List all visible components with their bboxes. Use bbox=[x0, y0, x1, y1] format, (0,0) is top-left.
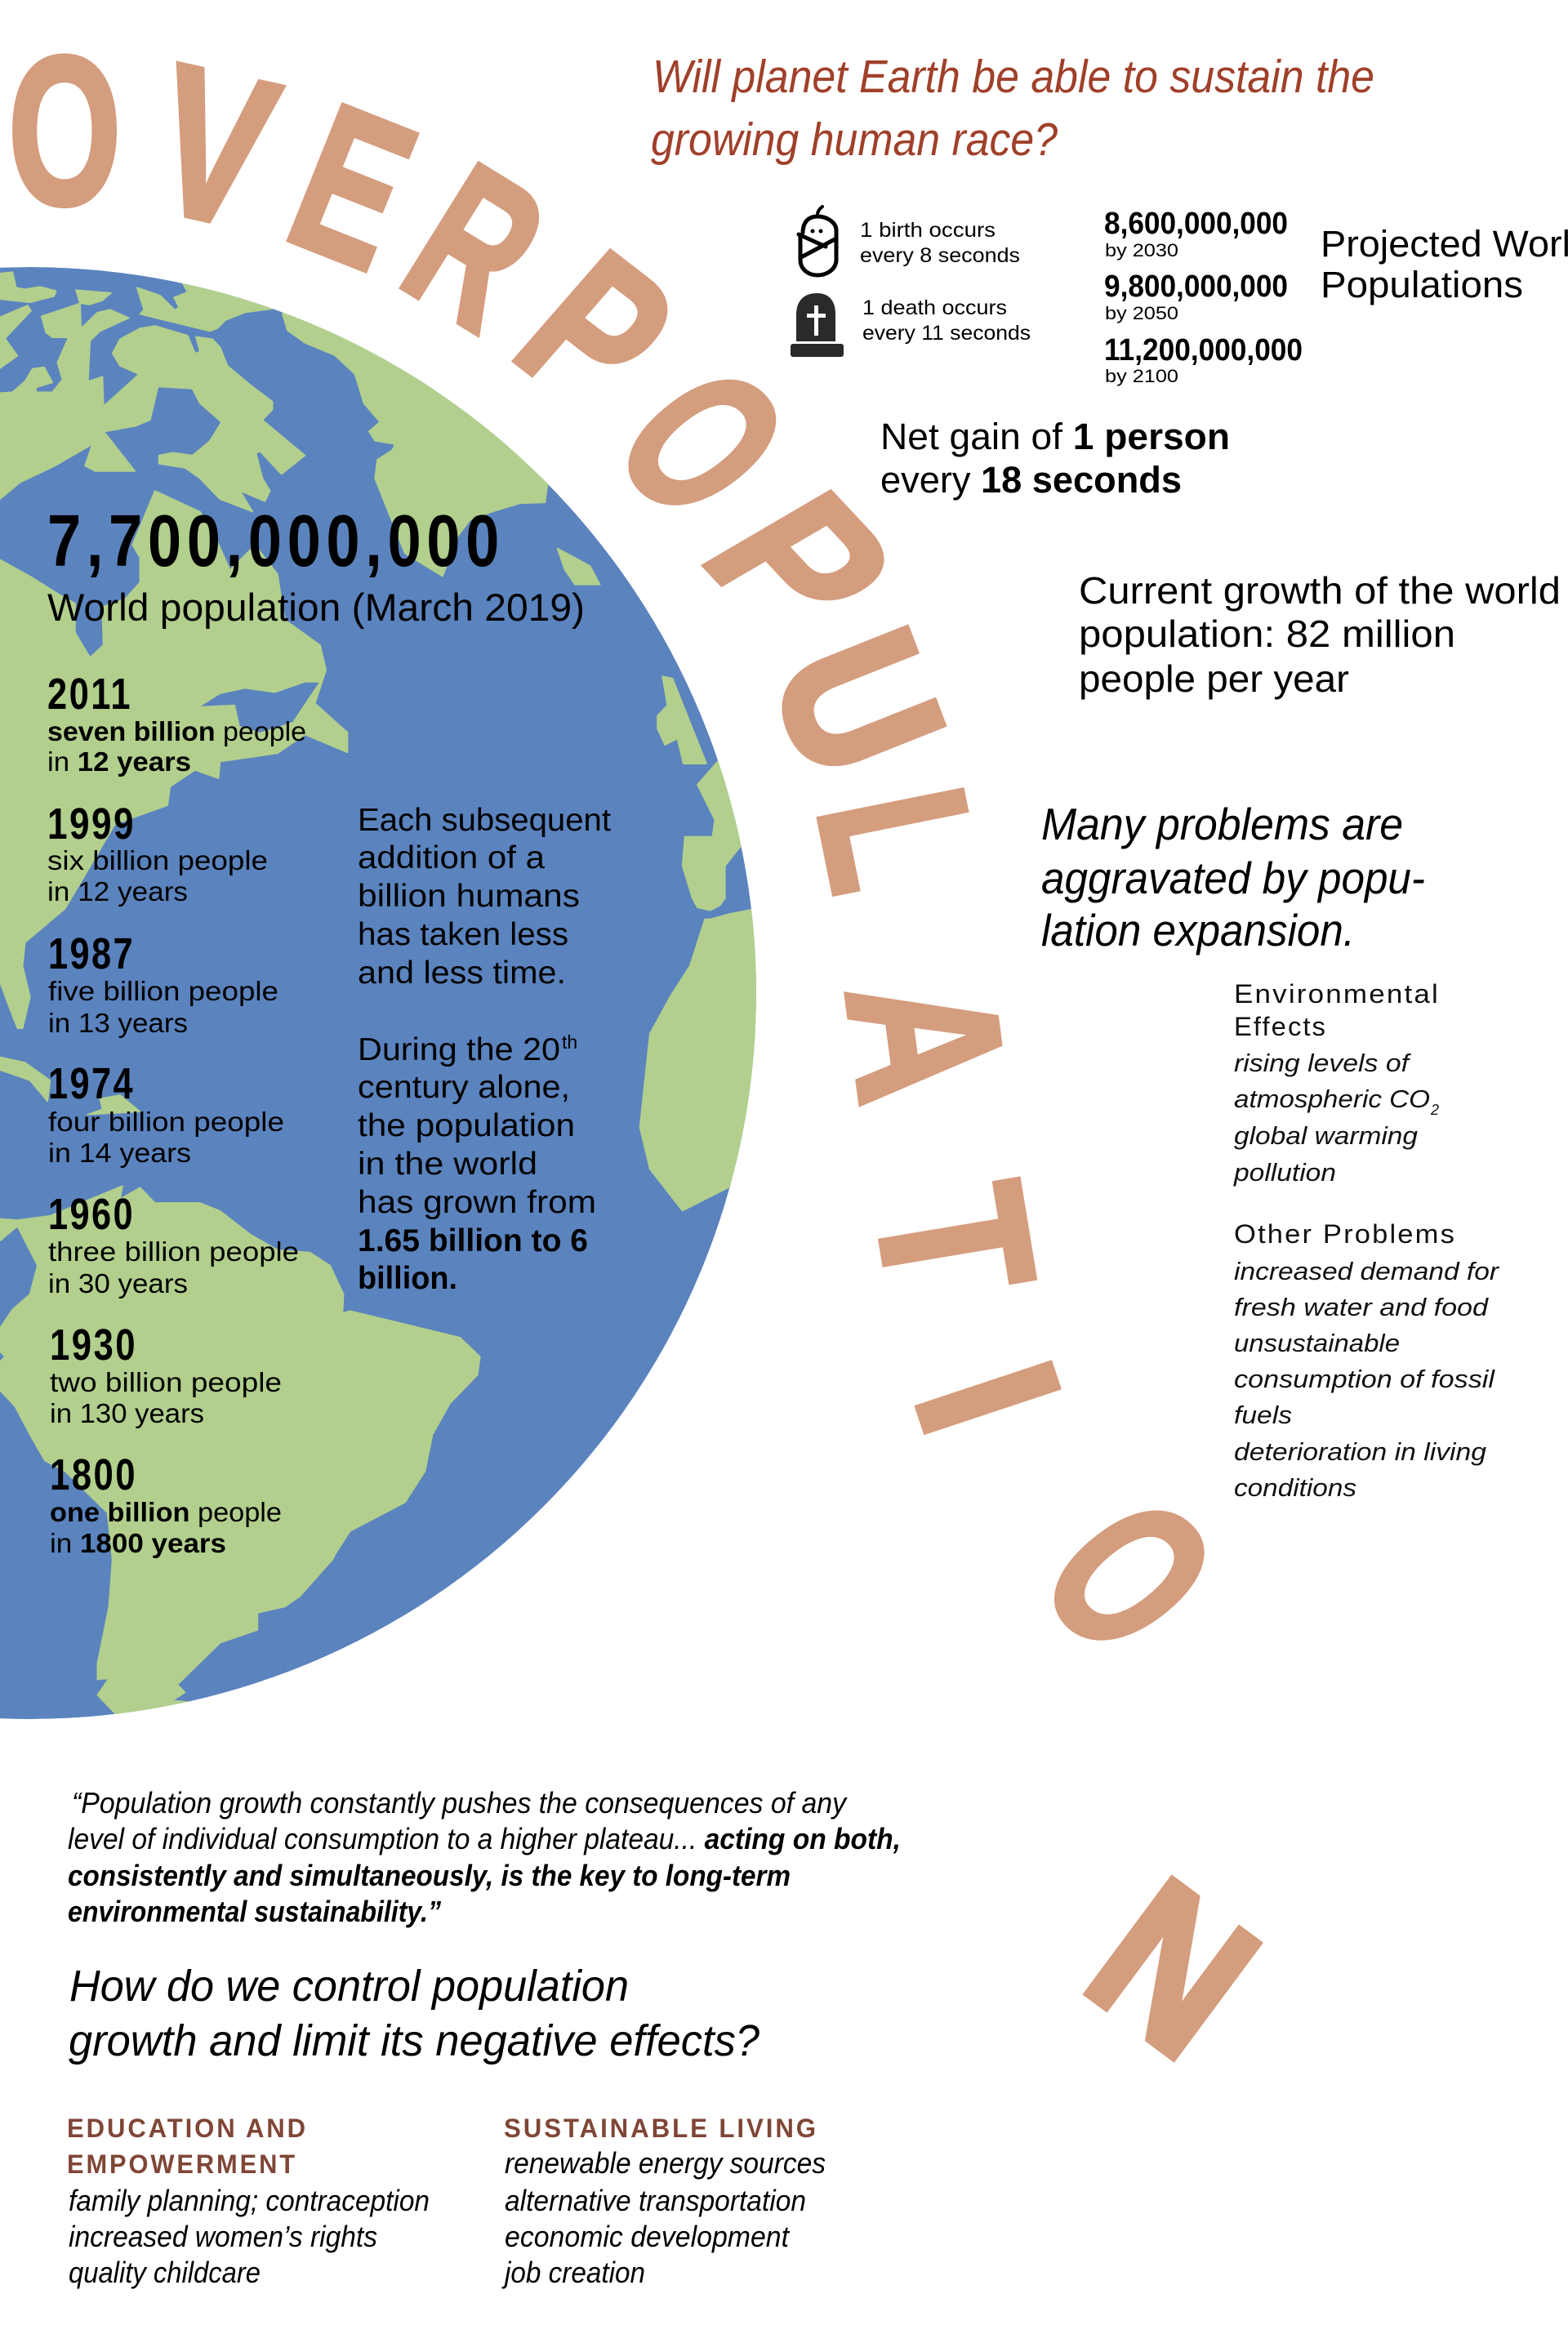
list: other problems: Other Problems bbox=[1234, 1219, 1456, 1249]
callout: net gain bbox=[880, 416, 1230, 501]
heading: question: Will planet Earth be able to sustain the bbox=[653, 51, 1374, 103]
text: death rate: every 11 seconds bbox=[862, 322, 1031, 345]
projected population figures: by 2050 bbox=[1105, 303, 1178, 323]
title: OVERPOPULATION arc: O bbox=[568, 329, 835, 557]
timeline: population milestones: 1930 bbox=[50, 1321, 137, 1370]
column: sustainable living: job creation bbox=[501, 2256, 645, 2289]
stat: world population bbox=[47, 501, 585, 629]
text block: each subsequent addition: and less time. bbox=[358, 956, 566, 991]
quote: level of individual consumption to a higher plateau... acting on both, bbox=[68, 1822, 901, 1855]
timeline: population milestones bbox=[47, 670, 306, 1558]
quote: environmental sustainability.” bbox=[68, 1895, 441, 1928]
list: environmental effects: rising levels of bbox=[1234, 1049, 1412, 1077]
text block: each subsequent addition: has taken less bbox=[358, 917, 568, 952]
text block: 20th century: has grown from bbox=[358, 1185, 596, 1220]
column: education and empowerment: increased women’s rights bbox=[69, 2220, 377, 2253]
text block: each subsequent addition: Each subsequent bbox=[358, 803, 611, 838]
timeline: population milestones: 1800 bbox=[50, 1450, 137, 1499]
quote: “Population growth constantly pushes the consequences of any bbox=[72, 1786, 848, 1820]
callout: net gain: Net gain of 1 person bbox=[880, 416, 1230, 457]
text: death rate: 1 death occurs bbox=[862, 296, 1007, 319]
callout: net gain: every 18 seconds bbox=[880, 459, 1182, 501]
heading: how do we control population: growth and limit its negative effects? bbox=[69, 2016, 760, 2065]
heading: many problems: lation expansion. bbox=[1041, 905, 1355, 956]
list: other problems: consumption of fossil bbox=[1234, 1365, 1495, 1393]
text block: 20th century: th bbox=[562, 1031, 577, 1053]
text: birth rate bbox=[860, 219, 1020, 267]
text: birth rate: every 8 seconds bbox=[860, 244, 1020, 267]
heading: how do we control population: How do we control population bbox=[69, 1962, 629, 2011]
title: OVERPOPULATION arc: P bbox=[657, 460, 943, 666]
title: OVERPOPULATION arc: N bbox=[1052, 1838, 1294, 2100]
title: OVERPOPULATION arc: T bbox=[830, 1169, 1080, 1312]
heading: question: growing human race? bbox=[651, 114, 1058, 166]
timeline: population milestones: in 14 years bbox=[48, 1138, 191, 1168]
stat: world population: 7,700,000,000 bbox=[47, 501, 505, 582]
list: environmental effects: 2 bbox=[1430, 1102, 1439, 1118]
projected population figures: 8,600,000,000 bbox=[1104, 207, 1288, 241]
title: OVERPOPULATION arc: A bbox=[801, 966, 1050, 1114]
text block: 20th century: the population bbox=[358, 1108, 575, 1143]
callout: current growth: population: 82 million bbox=[1079, 612, 1455, 655]
timeline: population milestones: in 12 years bbox=[47, 746, 191, 777]
list: environmental effects: global warming bbox=[1234, 1121, 1418, 1150]
title: OVERPOPULATION arc: V bbox=[134, 20, 295, 274]
column: sustainable living: economic development bbox=[505, 2220, 791, 2253]
text block: each subsequent addition: billion humans bbox=[358, 879, 580, 914]
text block: 20th century bbox=[358, 1031, 596, 1296]
list: other problems bbox=[1234, 1219, 1500, 1502]
text block: 20th century: billion. bbox=[358, 1261, 457, 1296]
timeline: population milestones: in 13 years bbox=[48, 1008, 188, 1038]
text block: 20th century: in the world bbox=[358, 1147, 537, 1182]
timeline: population milestones: seven billion people bbox=[47, 716, 306, 746]
timeline: population milestones: two billion people bbox=[50, 1367, 282, 1397]
heading: many problems bbox=[1041, 799, 1425, 956]
list: environmental effects: pollution bbox=[1233, 1158, 1336, 1187]
column: sustainable living bbox=[501, 2114, 826, 2289]
timeline: population milestones: in 12 years bbox=[47, 876, 188, 906]
title: OVERPOPULATION arc: R bbox=[370, 120, 581, 374]
list: other problems: conditions bbox=[1234, 1473, 1356, 1502]
globe illustration bbox=[0, 267, 800, 1731]
column: sustainable living: SUSTAINABLE LIVING bbox=[504, 2114, 818, 2143]
heading: many problems: Many problems are bbox=[1041, 799, 1403, 849]
callout: current growth: Current growth of the world bbox=[1079, 569, 1561, 612]
projected population figures: 11,200,000,000 bbox=[1104, 333, 1303, 368]
column: education and empowerment: EDUCATION AND bbox=[67, 2114, 308, 2143]
timeline: population milestones: in 30 years bbox=[48, 1268, 188, 1298]
projected population figures: 9,800,000,000 bbox=[1104, 270, 1288, 304]
icon: baby bbox=[799, 207, 836, 275]
callout: current growth bbox=[1079, 569, 1561, 700]
text block: each subsequent addition: addition of a bbox=[358, 840, 545, 875]
timeline: population milestones: six billion people bbox=[47, 845, 268, 875]
quote bbox=[68, 1786, 901, 1928]
stat: world population: World population (March 2019) bbox=[47, 586, 585, 629]
title: OVERPOPULATION arc: L bbox=[773, 771, 1023, 908]
column: education and empowerment: family planning; contraception bbox=[69, 2184, 430, 2217]
text: death rate bbox=[862, 296, 1031, 345]
timeline: population milestones: three billion people bbox=[48, 1236, 299, 1267]
text block: 20th century: century alone, bbox=[358, 1070, 570, 1105]
list: environmental effects: Effects bbox=[1234, 1012, 1327, 1041]
label: projected world populations bbox=[1321, 223, 1568, 305]
title: OVERPOPULATION arc: O bbox=[994, 1459, 1264, 1694]
title: OVERPOPULATION arc: U bbox=[729, 604, 986, 804]
list: environmental effects: Environmental bbox=[1234, 979, 1440, 1009]
timeline: population milestones: five billion people bbox=[48, 976, 278, 1006]
projected population figures bbox=[1104, 207, 1303, 386]
timeline: population milestones: 1974 bbox=[48, 1059, 135, 1108]
callout: current growth: people per year bbox=[1079, 657, 1349, 700]
projected population figures: by 2100 bbox=[1105, 366, 1178, 386]
heading: many problems: aggravated by popu- bbox=[1041, 853, 1425, 903]
timeline: population milestones: in 1800 years bbox=[50, 1528, 226, 1558]
timeline: population milestones: 1960 bbox=[48, 1190, 135, 1239]
timeline: population milestones: 1999 bbox=[47, 800, 136, 849]
list: other problems: fuels bbox=[1234, 1401, 1292, 1429]
heading: how do we control population bbox=[69, 1962, 760, 2065]
title: OVERPOPULATION arc: I bbox=[866, 1332, 1109, 1463]
text block: 20th century: During the 20 bbox=[358, 1032, 560, 1067]
column: education and empowerment: quality childcare bbox=[69, 2256, 261, 2289]
list: environmental effects: atmospheric CO bbox=[1234, 1085, 1430, 1113]
text: birth rate: 1 birth occurs bbox=[860, 219, 996, 242]
column: education and empowerment bbox=[67, 2114, 430, 2289]
list: other problems: deterioration in living bbox=[1234, 1437, 1486, 1466]
text block: 20th century: 1.65 billion to 6 bbox=[358, 1223, 588, 1258]
title: OVERPOPULATION arc: E bbox=[263, 60, 442, 314]
list: other problems: unsustainable bbox=[1234, 1329, 1400, 1357]
list: environmental effects bbox=[1233, 979, 1440, 1187]
icon: tombstone bbox=[791, 293, 844, 357]
quote: consistently and simultaneously, is the key to long-term bbox=[68, 1859, 791, 1892]
timeline: population milestones: one billion people bbox=[50, 1497, 282, 1527]
title: OVERPOPULATION arc: O bbox=[8, 13, 121, 249]
label: projected world populations: Populations bbox=[1321, 264, 1523, 305]
text block: each subsequent addition bbox=[358, 803, 611, 991]
list: other problems: fresh water and food bbox=[1234, 1293, 1490, 1321]
list: other problems: increased demand for bbox=[1234, 1257, 1500, 1285]
timeline: population milestones: in 130 years bbox=[50, 1398, 204, 1428]
heading: question bbox=[651, 51, 1374, 166]
title: OVERPOPULATION arc bbox=[8, 13, 1294, 2100]
timeline: population milestones: 2011 bbox=[47, 670, 132, 719]
timeline: population milestones: 1987 bbox=[48, 929, 135, 978]
projected population figures: by 2030 bbox=[1105, 240, 1178, 261]
timeline: population milestones: four billion people bbox=[48, 1107, 284, 1137]
title: OVERPOPULATION arc: P bbox=[476, 210, 716, 453]
column: sustainable living: alternative transportation bbox=[505, 2184, 806, 2217]
column: education and empowerment: EMPOWERMENT bbox=[67, 2149, 297, 2179]
column: sustainable living: renewable energy sources bbox=[505, 2146, 826, 2180]
